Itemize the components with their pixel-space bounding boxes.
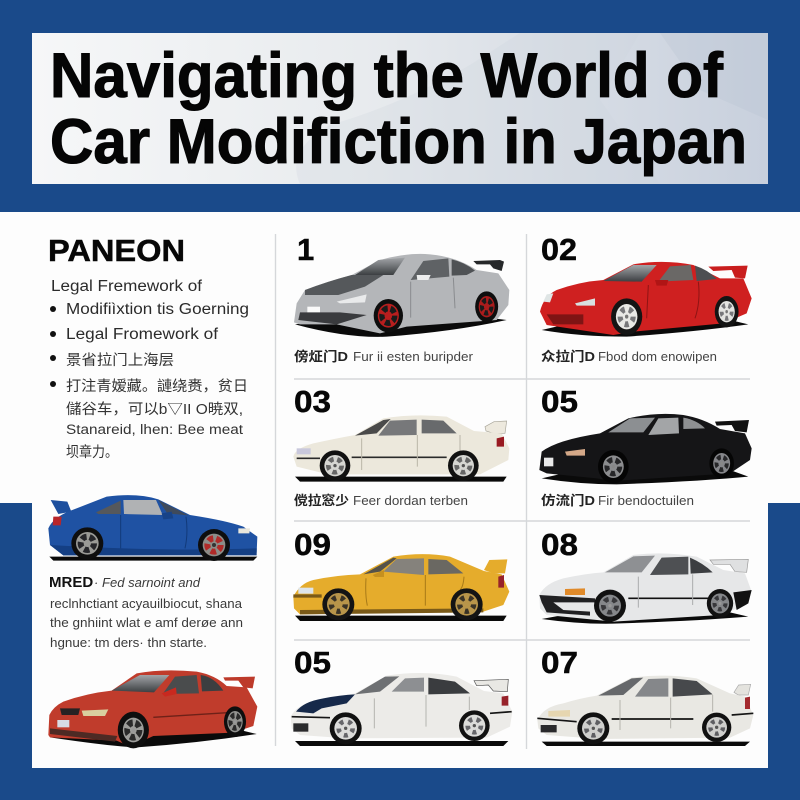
- title text: Navigating the World of: [50, 41, 724, 111]
- bullet list: Legal Fromework of: [66, 326, 219, 343]
- title text: [50, 41, 747, 177]
- caption: [541, 493, 694, 508]
- bullet list: 坝章力。: [66, 443, 118, 461]
- caption: 仿流门D: [541, 493, 595, 508]
- bullet list: 景省拉门上海层: [66, 352, 174, 369]
- car: silver sedan: [294, 254, 509, 337]
- caption: [541, 349, 717, 364]
- description paragraph: MRED: [49, 574, 93, 591]
- heading: PANEON: [48, 233, 185, 268]
- description paragraph: [49, 574, 243, 650]
- title banner: [32, 33, 768, 184]
- caption: Fbod dom enowipen: [598, 350, 717, 364]
- panel: item 05 lower: [291, 645, 512, 746]
- caption: 傥拉窓少: [294, 493, 349, 508]
- car: white coupe: [539, 553, 752, 624]
- bullet list: 打注青嫒藏。謰绕赉，贫日: [66, 378, 248, 395]
- bullet list: Modifiìxtion tis Goerning: [66, 301, 249, 318]
- description paragraph: reclnhctiant acyauilbiocut, shana: [50, 596, 243, 611]
- panel: item 1: [294, 232, 509, 364]
- left column: text block: [48, 233, 249, 461]
- caption: Feer dordan terben: [353, 494, 468, 508]
- intro line: Legal Fremework of: [51, 278, 203, 295]
- car: red coupe: [540, 262, 752, 337]
- caption: Fir bendoctuilen: [598, 494, 694, 508]
- panel: item 09: [293, 527, 509, 621]
- car: cream sedan: [293, 415, 509, 482]
- caption: [294, 493, 468, 508]
- white content panel: [0, 212, 800, 768]
- number: 03: [294, 384, 331, 419]
- number: 1: [297, 232, 314, 267]
- panel: item 08: [539, 527, 752, 624]
- car: white sedan with dark hood: [291, 673, 512, 746]
- description paragraph: · Fed sarnoint and: [94, 575, 201, 590]
- number: 07: [541, 645, 578, 680]
- caption: 傍炡门D: [294, 349, 348, 364]
- caption: 众拉门D: [541, 349, 595, 364]
- number: 09: [294, 527, 331, 562]
- description paragraph: the gnhiint wlat e amf derøe ann: [50, 615, 243, 630]
- number: 05: [294, 645, 331, 680]
- bullet list: Stanareid, lhen: Bee meat: [66, 422, 243, 437]
- bullet list: [50, 301, 249, 461]
- panel: item 07: [537, 645, 753, 746]
- description paragraph: hgnue: tm ders· thn starte.: [50, 635, 207, 650]
- caption: Fur ii esten buripder: [353, 350, 473, 364]
- panel: item 03: [293, 384, 509, 508]
- number: 02: [541, 232, 577, 267]
- car: yellow sedan: [293, 554, 509, 621]
- car: red sedan: [48, 670, 257, 748]
- number: 05: [541, 384, 578, 419]
- car: white sedan: [537, 676, 753, 746]
- caption: [294, 349, 473, 364]
- car: black sedan: [539, 414, 752, 484]
- panel: item 02: [540, 232, 752, 364]
- title text: Car Modifiction in Japan: [50, 107, 747, 177]
- car: blue coupe: [48, 495, 257, 561]
- number: 08: [541, 527, 578, 562]
- bullet list: 儲谷车，可以b▽II O暁双,: [66, 401, 243, 418]
- panel: item 05: [539, 384, 752, 508]
